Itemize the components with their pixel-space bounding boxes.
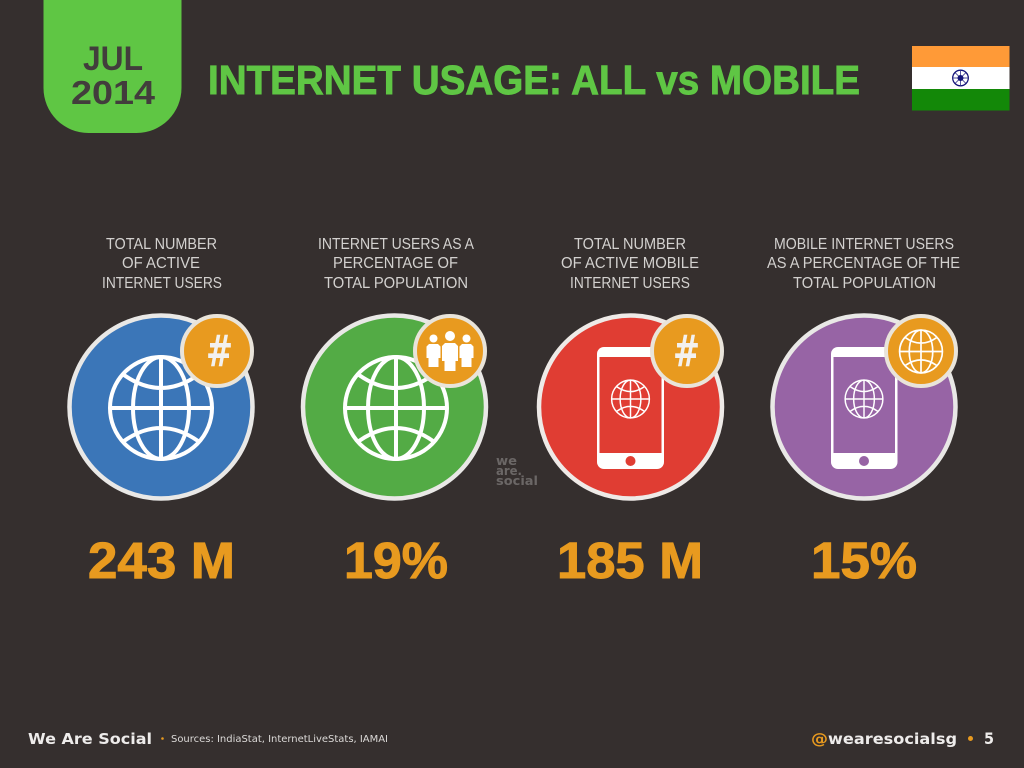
footer brand: We Are Social [28,730,152,748]
column 1 label: OF ACTIVE [122,255,200,272]
column 2 label: INTERNET USERS AS A [318,236,475,253]
icon: blue globe circle with hash badge: # [206,326,233,377]
stat: 19%: 19% [344,532,448,589]
column 3 label: INTERNET USERS [570,275,690,292]
column 4 label: AS A PERCENTAGE OF THE [767,255,960,272]
watermark logo [496,453,538,488]
stat: 185 M: 185 M [557,532,703,589]
stat: 15%: 15% [811,532,917,589]
date tab: 2014 [71,74,156,111]
column 3 label [561,236,699,292]
column 2 label: PERCENTAGE OF [333,255,458,272]
column 4 label: TOTAL POPULATION [793,275,936,292]
footer bullet [968,736,973,741]
footer sources: Sources: IndiaStat, InternetLiveStats, IAMAI [171,734,388,745]
footer separator dot [161,737,164,740]
column 3 label: OF ACTIVE MOBILE [561,255,699,272]
watermark logo: are. [496,463,522,478]
icon: red phone circle with hash badge: # [673,326,700,377]
date tab: JUL [83,40,143,78]
title: INTERNET USAGE: ALL vs MOBILE [208,57,860,103]
column 4 label [767,236,960,292]
watermark logo: social [496,473,538,488]
stat: 243 M: 243 M [88,532,235,589]
icon: blue globe circle with hash badge [70,316,252,498]
column 1 label [102,236,222,292]
watermark logo: we [496,453,517,468]
column 2 label: TOTAL POPULATION [324,275,468,292]
column 1 label: INTERNET USERS [102,275,222,292]
footer handle: wearesocialsg [828,730,957,748]
date tab [44,0,182,133]
icon: green globe circle with people badge [303,316,486,498]
icon: purple phone circle with globe badge [772,316,956,498]
column 2 label [318,236,475,292]
column 1 label: TOTAL NUMBER [106,236,217,253]
page number: 5 [984,729,994,748]
column 4 label: MOBILE INTERNET USERS [774,236,954,253]
footer handle: @ [811,730,828,748]
icon: red phone circle with hash badge [539,316,722,498]
icon: India flag [912,46,1010,110]
column 3 label: TOTAL NUMBER [574,236,686,253]
